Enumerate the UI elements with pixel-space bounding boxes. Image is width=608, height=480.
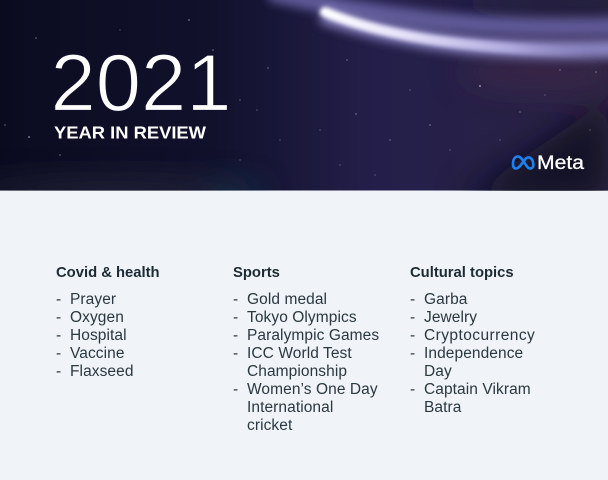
panel: Covid & health <box>56 265 160 380</box>
heading: Covid & health: Covid & health <box>56 265 160 281</box>
list: Sports topics: cricket <box>247 417 292 434</box>
list: Cultural topics items: - <box>410 345 415 362</box>
list: Sports topics: International <box>247 399 333 416</box>
list: Cultural topics items <box>410 291 535 416</box>
list: Cultural topics items: - <box>410 291 415 308</box>
arc: light streak <box>270 0 608 52</box>
list: Covid & health topics: - <box>56 309 61 326</box>
panel: Cultural topics <box>410 265 535 416</box>
title: 2021: 2021 <box>50 38 232 128</box>
list: Covid & health topics: Hospital <box>70 327 127 344</box>
list: Covid & health topics: Vaccine <box>70 345 125 362</box>
heading: Cultural topics: Cultural topics <box>410 265 514 281</box>
list: Cultural topics items: Day <box>424 363 452 380</box>
icon: infinity mark <box>513 156 533 168</box>
list: Cultural topics items: - <box>410 381 415 398</box>
list: Covid & health topics: - <box>56 327 61 344</box>
panel: header banner <box>0 0 608 191</box>
list: Cultural topics items: Cryptocurrency <box>424 327 535 344</box>
list: Covid & health topics: Prayer <box>70 291 116 308</box>
list: Sports topics: - <box>233 309 238 326</box>
list: Covid & health topics: Flaxseed <box>70 363 134 380</box>
list: Cultural topics items: - <box>410 309 415 326</box>
glow: haze and dark shapes <box>0 0 608 200</box>
wordmark: Meta <box>537 153 584 174</box>
list: Sports topics: Tokyo Olympics <box>247 309 357 326</box>
list: Sports topics: Championship <box>247 363 347 380</box>
list: Cultural topics items: Jewelry <box>424 309 477 326</box>
logo: Meta <box>513 153 584 174</box>
list: Covid & health topics <box>56 291 134 380</box>
list: Cultural topics items: Independence <box>424 345 523 362</box>
list: Covid & health topics: Oxygen <box>70 309 124 326</box>
subtitle: year in review: YEAR IN REVIEW <box>54 122 206 142</box>
list: Cultural topics items: Garba <box>424 291 467 308</box>
list: Cultural topics items: Captain Vikram <box>424 381 531 398</box>
list: Covid & health topics: - <box>56 291 61 308</box>
heading: Sports: Sports <box>233 265 280 281</box>
list: Sports topics: - <box>233 327 238 344</box>
panel: Sports <box>233 265 379 434</box>
list: Cultural topics items: Batra <box>424 399 461 416</box>
list: Sports topics: Women’s One Day <box>247 381 378 398</box>
list: Sports topics: - <box>233 291 238 308</box>
list: Sports topics: - <box>233 381 238 398</box>
list: Sports topics: Gold medal <box>247 291 327 308</box>
stars <box>4 19 597 176</box>
list: Sports topics <box>233 291 379 434</box>
list: Sports topics: ICC World Test <box>247 345 352 362</box>
list: Cultural topics items: - <box>410 327 416 344</box>
list: Covid & health topics: - <box>56 363 61 380</box>
list: Covid & health topics: - <box>56 345 61 362</box>
list: Sports topics: Paralympic Games <box>247 327 379 344</box>
list: Sports topics: - <box>233 345 238 362</box>
